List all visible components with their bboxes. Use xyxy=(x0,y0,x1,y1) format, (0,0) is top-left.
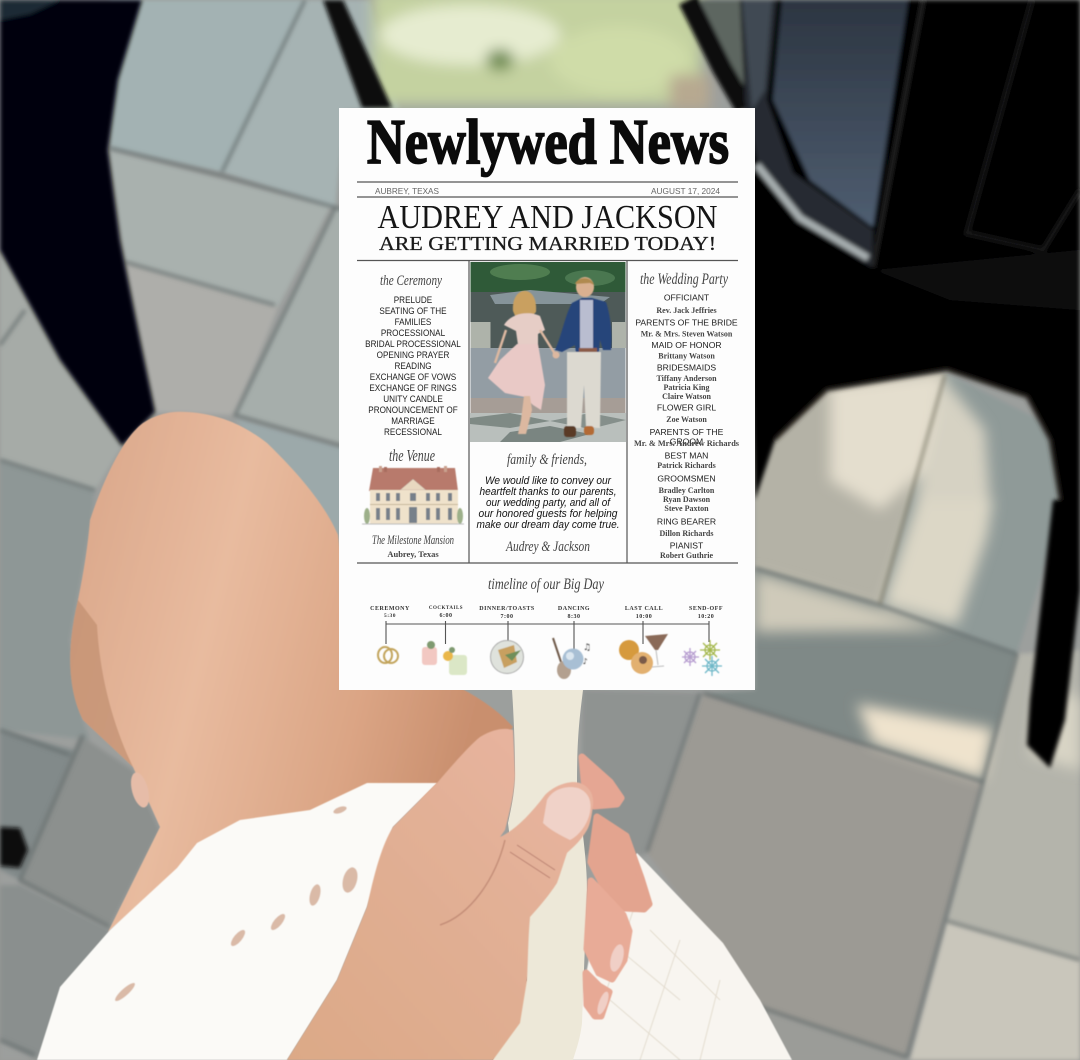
headline: ARE GETTING MARRIED TODAY! xyxy=(379,233,716,255)
timeline labels: 6:00 xyxy=(440,613,452,619)
timeline labels: 5:30 xyxy=(384,613,396,619)
wedding party roles and names: Claire Watson xyxy=(662,392,711,401)
wedding party roles and names: Robert Guthrie xyxy=(660,551,713,560)
thank-you text: We would like to convey our xyxy=(485,475,612,487)
ceremony order list xyxy=(365,294,461,437)
icon: cocktails xyxy=(422,641,467,675)
ceremony order list: RECESSIONAL xyxy=(384,426,442,437)
venue name: The Milestone Mansion xyxy=(372,532,454,547)
newspaper panel xyxy=(339,106,755,690)
wedding party roles and names xyxy=(634,292,740,560)
wedding party roles and names: PARENTS OF THE BRIDE xyxy=(635,318,738,328)
fan handle xyxy=(493,690,587,1060)
icon: guitar, disco ball and music notes: ♫ xyxy=(583,643,591,653)
wedding party roles and names: BEST MAN xyxy=(665,450,708,460)
ceremony order list: EXCHANGE OF VOWS xyxy=(370,371,456,382)
column: the wedding party xyxy=(634,271,740,560)
headline: AUDREY AND JACKSON xyxy=(378,199,718,236)
venue location: Aubrey, Texas xyxy=(387,549,439,559)
wedding party roles and names: Patricia King xyxy=(664,383,710,392)
timeline labels: DANCING xyxy=(558,606,590,612)
ceremony order list: EXCHANGE OF RINGS xyxy=(369,382,457,393)
column rules xyxy=(357,260,738,563)
timeline chart xyxy=(370,606,723,679)
wedding party roles and names: Steve Paxton xyxy=(664,504,709,513)
ceremony order list: PROCESSIONAL xyxy=(381,327,445,338)
icon: guitar, disco ball and music notes: ♪ xyxy=(582,657,588,666)
ceremony order list: FAMILIES xyxy=(395,316,431,327)
thank-you text: our honored guests for helping xyxy=(478,508,618,520)
ceremony order list: BRIDAL PROCESSIONAL xyxy=(365,338,461,349)
ceremony order list: PRELUDE xyxy=(394,294,432,305)
signature: Audrey & Jackson xyxy=(505,539,590,555)
timeline labels: SEND-OFF xyxy=(689,606,723,612)
timeline labels: 8:30 xyxy=(568,614,580,620)
ceremony order list: UNITY CANDLE xyxy=(383,393,443,404)
wedding party roles and names: Tiffany Anderson xyxy=(656,374,717,383)
thank-you text xyxy=(476,475,620,531)
icon: cookies and martini xyxy=(619,634,668,674)
timeline labels: 7:00 xyxy=(500,614,514,620)
icon: venue mansion xyxy=(362,466,464,524)
wedding party roles and names: OFFICIANT xyxy=(664,292,710,302)
woman xyxy=(488,291,555,434)
icon: guitar, disco ball and music notes xyxy=(553,638,591,679)
leg xyxy=(70,412,513,932)
dateline: AUBREY, TEXAS xyxy=(375,186,439,196)
wedding party roles and names: BRIDESMAIDS xyxy=(657,362,716,372)
timeline labels: 10:20 xyxy=(698,614,714,620)
timeline labels: LAST CALL xyxy=(625,606,663,612)
wedding party roles and names: GROOM xyxy=(670,436,703,446)
lace dress xyxy=(37,783,792,1060)
timeline labels xyxy=(370,606,723,620)
wedding party roles and names: RING BEARER xyxy=(657,516,716,526)
ceremony order list: SEATING OF THE xyxy=(379,305,447,316)
black chair right xyxy=(688,0,1080,768)
greenery in background xyxy=(372,0,710,110)
column: the ceremony: the Ceremony xyxy=(380,273,442,289)
timeline labels: COCKTAILS xyxy=(429,606,463,611)
masthead title: Newlywed News xyxy=(367,106,729,177)
hand holding fan xyxy=(287,729,593,1060)
black chair left xyxy=(0,0,392,868)
wedding party roles and names: Mr. & Mrs. Andrew Richards xyxy=(634,439,740,448)
family and friends message xyxy=(476,452,620,555)
wedding party roles and names: Brittany Watson xyxy=(658,352,715,360)
thank-you text: our wedding party, and all of xyxy=(486,497,611,509)
wedding party roles and names: Mr. & Mrs. Steven Watson xyxy=(641,330,733,338)
timeline labels: CEREMONY xyxy=(370,606,410,612)
family and friends message: family & friends, xyxy=(507,452,587,468)
wedding party roles and names: MAID OF HONOR xyxy=(651,340,722,350)
ceremony order list: PRONOUNCEMENT OF xyxy=(368,404,458,415)
thank-you text: make our dream day come true. xyxy=(476,519,620,531)
wedding party roles and names: PIANIST xyxy=(670,540,704,550)
wedding party roles and names: Ryan Dawson xyxy=(663,495,711,504)
wedding party roles and names: Zoe Watson xyxy=(666,415,707,424)
timeline labels: 10:00 xyxy=(636,614,652,620)
icon: fireworks xyxy=(682,640,722,676)
ceremony order list: READING xyxy=(394,360,432,371)
ceremony order list: OPENING PRAYER xyxy=(377,349,450,360)
sunlit patches on paving xyxy=(755,372,1080,779)
dateline xyxy=(357,182,738,197)
ceremony order list: MARRIAGE xyxy=(391,415,435,426)
column: the ceremony xyxy=(362,273,464,559)
fingers behind fan xyxy=(582,757,649,1016)
icon: wedding rings xyxy=(378,647,398,663)
icon: dinner plate xyxy=(490,640,524,674)
thank-you text: heartfelt thanks to our parents, xyxy=(480,486,616,498)
timeline heading: timeline of our Big Day xyxy=(488,576,605,593)
wedding party roles and names: PARENTS OF THE xyxy=(650,427,724,437)
photo of the couple xyxy=(470,262,626,442)
dateline: AUGUST 17, 2024 xyxy=(651,186,720,196)
headline xyxy=(378,199,718,255)
man xyxy=(552,277,611,437)
wedding party roles and names: Dillon Richards xyxy=(659,529,714,538)
venue heading: the Venue xyxy=(389,446,435,465)
wedding party roles and names: FLOWER GIRL xyxy=(657,402,716,412)
timeline labels: DINNER/TOASTS xyxy=(479,606,535,612)
wedding party roles and names: Patrick Richards xyxy=(657,461,716,470)
wedding party roles and names: Bradley Carlton xyxy=(659,486,715,495)
wedding party roles and names: GROOMSMEN xyxy=(657,474,716,484)
column: the wedding party: the Wedding Party xyxy=(640,271,729,288)
wedding party roles and names: Rev. Jack Jeffries xyxy=(656,306,717,315)
